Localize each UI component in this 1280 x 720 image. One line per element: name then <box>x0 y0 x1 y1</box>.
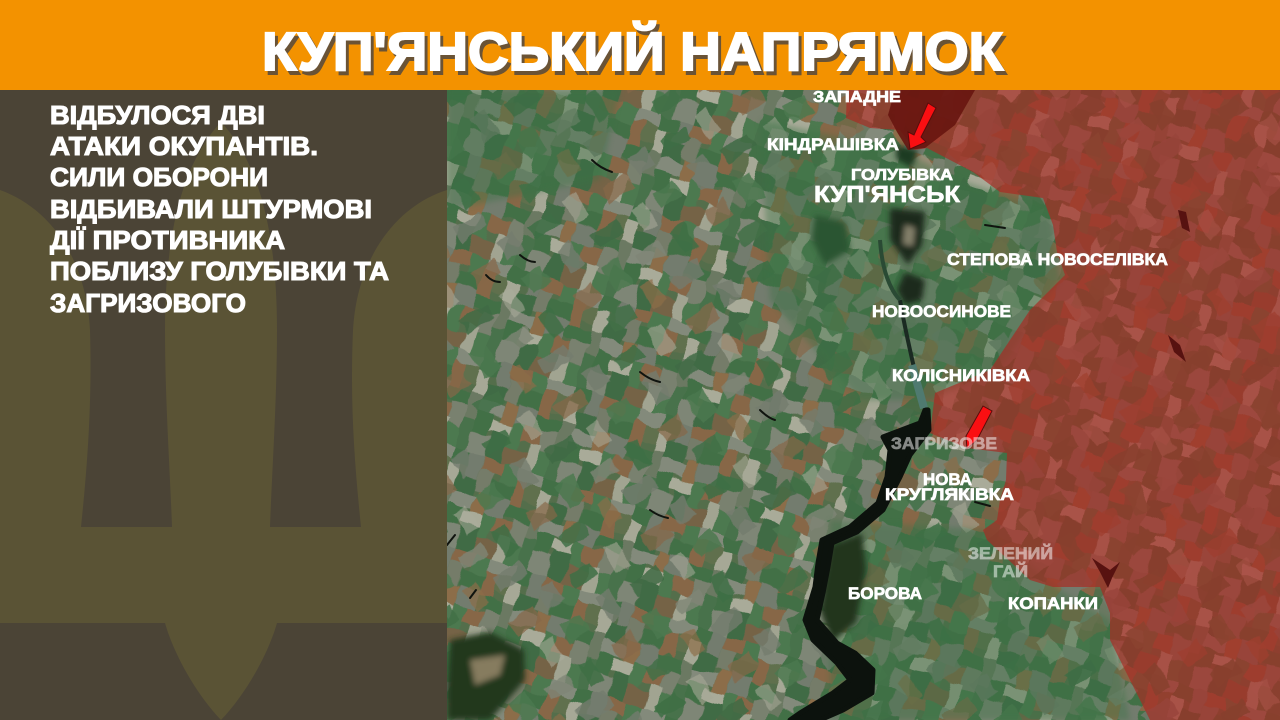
label: Нова Кругляківка: КРУГЛЯКІВКА <box>885 485 1014 504</box>
panel: satellite map <box>430 75 1280 720</box>
map: forest patches and settlements <box>447 145 925 720</box>
text block: summary of attacks: СИЛИ ОБОРОНИ <box>50 162 268 192</box>
text block: summary of attacks: ПОБЛИЗУ ГОЛУБІВКИ ТА <box>50 256 389 286</box>
map: occupied territory red overlay <box>846 90 1280 720</box>
label: Голубівка: ГОЛУБІВКА <box>851 167 953 184</box>
label: Колісниківка: КОЛІСНИКІВКА <box>892 366 1030 385</box>
text block: summary of attacks: ВІДБУЛОСЯ ДВІ <box>50 100 265 130</box>
label: Степова Новоселівка: СТЕПОВА НОВОСЕЛІВКА <box>947 250 1168 269</box>
label: Борова: БОРОВА <box>848 584 922 603</box>
label: Нова Кругляківка <box>885 470 1014 504</box>
label: Нова Кругляківка: НОВА <box>923 470 972 489</box>
text block: summary of attacks: ВІДБИВАЛИ ШТУРМОВІ <box>50 194 372 224</box>
map: dark reservoir ponds in occupied area <box>1092 210 1190 588</box>
label: Западне: ЗАПАДНЕ <box>813 89 901 106</box>
panel: left olive background <box>0 90 447 720</box>
map: darkening tone over fields <box>447 90 1280 720</box>
text block: summary of attacks: ЗАГРИЗОВОГО <box>50 288 246 318</box>
header bar <box>0 0 1280 90</box>
label: Копанки: КОПАНКИ <box>1008 594 1098 613</box>
map labels <box>767 89 1168 613</box>
label: Зелений Гай: ГАЙ <box>993 562 1028 581</box>
map: river <box>790 240 929 720</box>
text block: summary of attacks <box>50 100 389 318</box>
map: green tone variation <box>447 90 1130 720</box>
label: Загризове: ЗАГРИЗОВЕ <box>891 434 997 453</box>
arrow: southern attack near Zahryzove <box>966 406 992 449</box>
map: dark red assault zone <box>888 90 975 150</box>
text block: summary of attacks: АТАКИ ОКУПАНТІВ. <box>50 131 318 161</box>
map: farmland field mosaic <box>430 75 1280 720</box>
label: Зелений Гай <box>968 544 1053 581</box>
map: ravines <box>447 160 1005 598</box>
label: Кіндрашівка: КІНДРАШІВКА <box>767 135 899 154</box>
title: КУП'ЯНСЬКИЙ НАПРЯМОК <box>262 21 1004 82</box>
arrow: northern attack near Holubivka <box>908 103 936 149</box>
text block: summary of attacks: ДІЇ ПРОТИВНИКА <box>50 225 285 255</box>
label: Новоосинове: НОВООСИНОВЕ <box>872 302 1011 321</box>
icon: trident emblem watermark <box>0 122 447 720</box>
label: Куп'янськ: КУП'ЯНСЬК <box>814 181 961 207</box>
label: Зелений Гай: ЗЕЛЕНИЙ <box>968 544 1053 563</box>
